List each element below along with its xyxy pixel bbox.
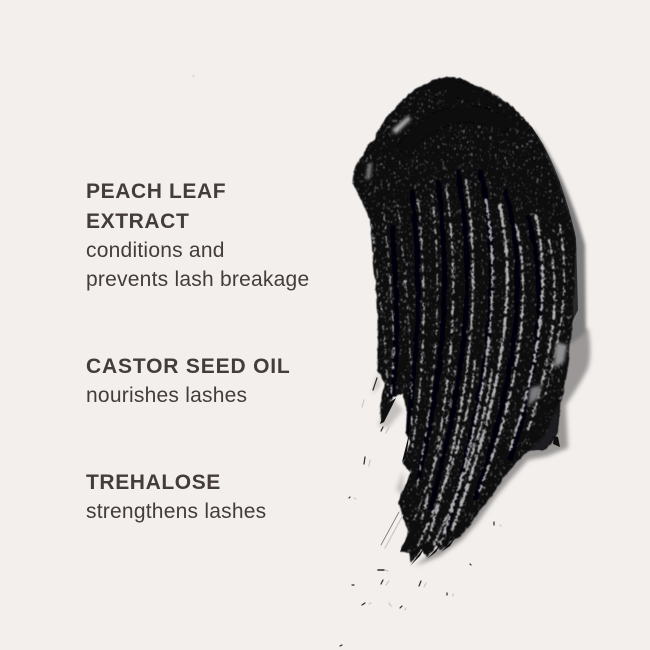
text block: peach leaf extract: conditions and — [86, 239, 225, 262]
text block: peach leaf extract: prevents lash breakage — [86, 268, 309, 291]
translucent edge — [528, 400, 560, 452]
text block: peach leaf extract — [86, 180, 309, 291]
text block: castor seed oil: CASTOR SEED OIL — [86, 355, 291, 378]
shiny streaks — [366, 116, 567, 548]
specks and flecks — [193, 76, 501, 646]
text block: trehalose: TREHALOSE — [86, 471, 221, 494]
text block: trehalose: strengthens lashes — [86, 500, 266, 523]
text block: peach leaf extract: PEACH LEAF — [86, 180, 226, 203]
highlight: right lower shine — [554, 342, 567, 368]
highlight: top left shine — [392, 116, 411, 134]
smear body — [345, 70, 585, 570]
text block: peach leaf extract: EXTRACT — [86, 210, 189, 233]
mascara smear swatch — [193, 70, 590, 646]
glitter texture — [345, 90, 585, 565]
text block: castor seed oil: nourishes lashes — [86, 384, 247, 407]
highlight: center lower shine — [528, 385, 542, 406]
smooth dark band across the top — [398, 106, 515, 156]
text block: trehalose — [86, 471, 266, 523]
text block: castor seed oil — [86, 355, 291, 407]
dark grooves — [392, 170, 539, 535]
smear shadow — [372, 125, 590, 566]
bristle teeth along lower edge — [380, 398, 560, 566]
highlight: left bulge shine — [366, 162, 372, 180]
